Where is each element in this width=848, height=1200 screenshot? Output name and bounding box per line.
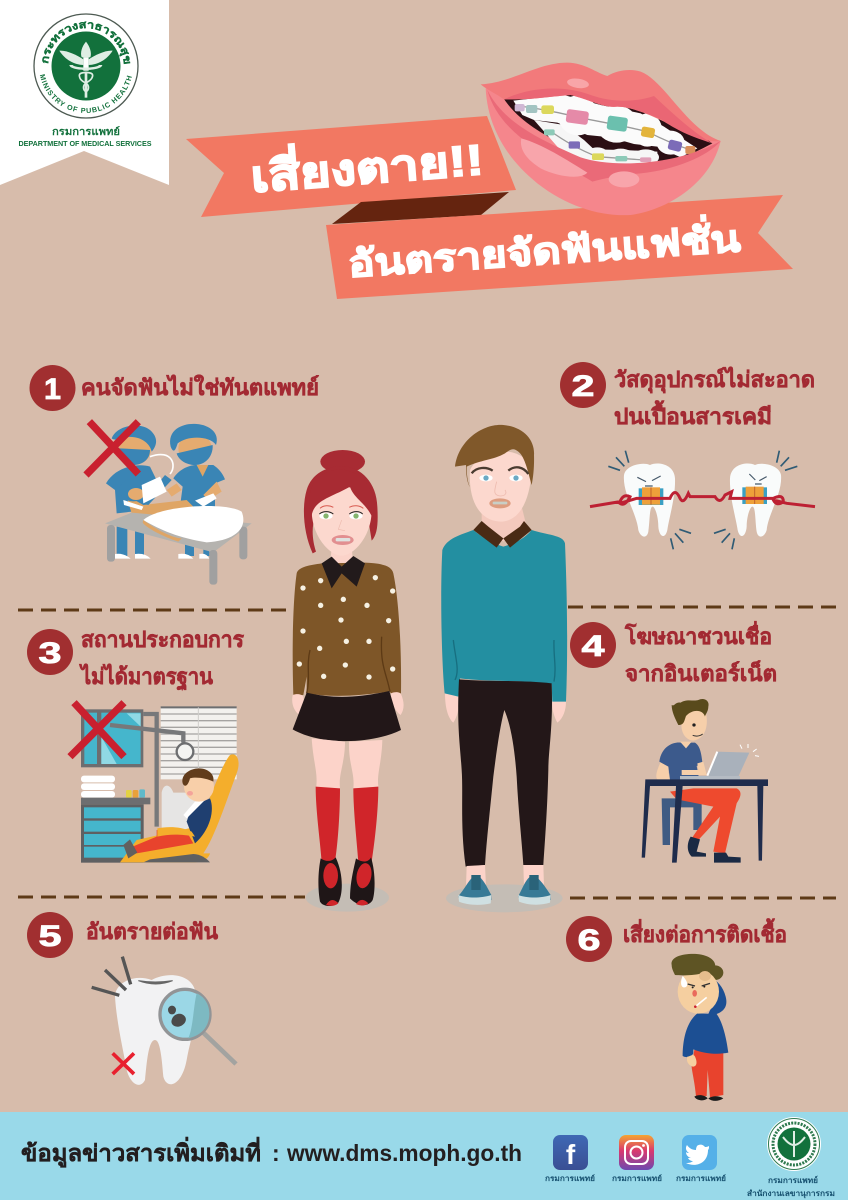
icon: twitter	[682, 1135, 717, 1170]
dental chair	[120, 754, 239, 862]
department name thai: กรมการแพทย์	[52, 126, 120, 138]
upper teeth	[513, 95, 697, 157]
upper lip shading	[504, 89, 712, 143]
table	[105, 513, 252, 552]
arms	[167, 482, 222, 500]
item 1 heading: คนจัดฟันไม่ใช่ทันตแพทย์	[81, 374, 319, 400]
sweat drop	[681, 976, 687, 987]
boy torso	[187, 798, 212, 843]
shoes	[694, 1095, 723, 1101]
neck	[482, 507, 527, 542]
footer bar	[0, 1112, 848, 1200]
lamp arm	[110, 714, 183, 827]
right surgeon legs	[185, 540, 209, 556]
item 4 heading	[624, 620, 777, 686]
footer info text	[21, 1136, 522, 1168]
social labels: กรมการแพทย์	[545, 1174, 595, 1183]
face	[470, 451, 532, 522]
man character	[441, 425, 567, 912]
nose	[692, 990, 697, 997]
stress marks	[92, 957, 131, 995]
item 4 number badge: 4	[582, 630, 605, 663]
cabinet	[81, 798, 150, 804]
item 4 heading: โฆษณาชวนเชื่อ	[624, 620, 772, 649]
red cross	[86, 422, 138, 475]
brows	[472, 467, 528, 474]
hands	[445, 693, 566, 723]
item 6 illustration: sick boy	[672, 954, 728, 1101]
stress marks	[608, 451, 797, 549]
item 6 number badge: 6	[578, 924, 600, 957]
polka dots	[297, 575, 395, 680]
mouth interior	[502, 92, 712, 165]
item 2 number badge: 2	[572, 370, 594, 403]
boy head	[184, 772, 214, 802]
raised arm	[707, 977, 726, 1014]
item 1 number badge: 1	[44, 373, 61, 406]
social labels	[545, 1174, 726, 1183]
title ribbon 2	[326, 195, 793, 299]
spittoon	[162, 786, 197, 830]
sweater folds	[453, 640, 555, 682]
item 4 heading: จากอินเตอร์เน็ต	[625, 659, 777, 686]
legs	[670, 788, 741, 853]
dashed dividers	[18, 607, 836, 898]
hair	[455, 425, 534, 487]
left surgeon legs	[117, 527, 144, 556]
hair	[672, 954, 715, 975]
item 3 number badge	[27, 629, 73, 675]
hair back	[304, 466, 378, 553]
thermometer	[695, 997, 707, 1007]
ankles	[466, 865, 544, 887]
hands	[292, 692, 404, 715]
item 3 number badge: 3	[38, 637, 62, 670]
magnifier	[203, 1033, 236, 1064]
head	[678, 970, 719, 1014]
seal ring	[34, 14, 138, 118]
hand	[699, 971, 711, 981]
neck	[330, 547, 353, 567]
woman character	[292, 450, 404, 912]
shoes	[318, 857, 375, 906]
item 6 number badge	[566, 916, 612, 962]
item 3 heading: ไม่ได้มาตรฐาน	[79, 663, 213, 691]
right surgeon head	[178, 433, 212, 464]
right tooth	[730, 464, 781, 537]
item 5 illustration: tooth and magnifier	[92, 957, 236, 1085]
footer info text: :	[272, 1140, 280, 1166]
item 2 heading: วัสดุอุปกรณ์ไม่สะอาด	[614, 366, 815, 394]
upper lip	[481, 63, 721, 141]
item 4 number badge	[570, 622, 616, 668]
eyes	[319, 513, 333, 519]
ribbon fold	[332, 192, 509, 224]
shoes	[458, 875, 551, 901]
shoes	[688, 837, 706, 857]
title line 1: เสี่ยงตาย!!	[249, 129, 485, 202]
item 1 illustration: surgeons	[86, 422, 252, 585]
lower inner lip	[487, 90, 721, 182]
laptop	[708, 752, 749, 777]
item 4 illustration: man at laptop	[642, 699, 768, 863]
faces	[637, 474, 767, 486]
collar	[473, 521, 532, 548]
mouth with braces	[481, 63, 721, 215]
spark lines	[740, 744, 759, 756]
table	[642, 779, 768, 863]
item 1 number badge	[30, 365, 76, 411]
towels	[81, 776, 115, 782]
brackets	[515, 104, 695, 162]
item 3 illustration: dental clinic	[70, 703, 239, 863]
legs	[312, 738, 382, 788]
nose and lips	[338, 520, 345, 531]
collar	[322, 556, 365, 588]
fringe	[309, 469, 374, 518]
floor shadow	[306, 884, 389, 912]
ministry logo banner	[0, 0, 169, 185]
arch wire	[519, 106, 691, 160]
social labels: กรมการแพทย์	[612, 1174, 662, 1183]
item 5 number badge: 5	[38, 920, 62, 953]
eyes	[479, 475, 493, 481]
title line 2: อันตรายจัดฟันแฟชั่น	[346, 212, 742, 285]
skirt	[293, 691, 401, 741]
footer seal	[767, 1117, 821, 1171]
icon: instagram	[619, 1135, 654, 1170]
seal emblem	[59, 42, 113, 98]
trousers	[458, 679, 552, 867]
item 2 heading: ปนเปื้อนสารเคมี	[614, 400, 772, 429]
torso	[683, 1013, 728, 1057]
arm back	[656, 760, 680, 779]
footer info text: www.dms.moph.go.th	[286, 1140, 522, 1166]
item 5 heading: อันตรายต่อฟัน	[86, 919, 218, 944]
lower teeth	[534, 120, 659, 168]
sheet	[143, 506, 243, 542]
decay spots	[168, 1006, 176, 1014]
footer seal labels: กรมการแพทย์	[768, 1175, 818, 1185]
arm	[682, 762, 707, 775]
item 2 heading	[614, 366, 815, 429]
red cross	[70, 703, 124, 757]
hair back	[707, 965, 723, 980]
seal text top: กระทรวงสาธารณสุข	[42, 21, 130, 64]
drip tube	[150, 455, 173, 474]
icon: facebook: f	[566, 1139, 576, 1170]
left surgeon head	[119, 434, 151, 465]
footer seal labels	[747, 1175, 835, 1199]
left tooth	[624, 464, 675, 537]
item 2 illustration: teeth pulling wire	[590, 451, 815, 549]
item 3 heading	[79, 627, 244, 691]
right surgeon body	[173, 465, 225, 510]
eyes	[688, 983, 710, 986]
window blinds	[161, 707, 237, 779]
torso	[659, 743, 703, 780]
floor shadow	[446, 884, 563, 912]
boy legs	[128, 830, 193, 853]
left surgeon body	[106, 465, 157, 513]
chair	[662, 798, 702, 845]
social labels: กรมการแพทย์	[676, 1174, 726, 1183]
item 2 number badge	[560, 362, 606, 408]
seal text bottom: MINISTRY OF PUBLIC HEALTH	[40, 74, 132, 113]
bottles	[126, 790, 132, 798]
lip highlights	[566, 77, 590, 89]
lower hand	[687, 1055, 697, 1067]
footer seal labels: สำนักงานเลขานุการกรม	[747, 1189, 835, 1199]
item 5 number badge	[27, 912, 73, 958]
title ribbon 1	[186, 116, 516, 224]
socks	[316, 787, 378, 862]
red wire	[590, 492, 815, 507]
legs	[692, 1050, 723, 1097]
sweater	[441, 530, 567, 702]
red x	[113, 1053, 134, 1074]
brackets	[639, 488, 663, 505]
department name english: DEPARTMENT OF MEDICAL SERVICES	[18, 139, 152, 148]
nose and lips	[495, 482, 506, 496]
wall cabinet	[81, 709, 143, 767]
patient	[126, 495, 193, 530]
item 3 heading: สถานประกอบการ	[81, 627, 244, 652]
icon: facebook	[553, 1135, 588, 1170]
tooth	[115, 975, 196, 1085]
sweater folds	[307, 637, 390, 693]
sweater	[293, 563, 401, 696]
lower lip	[486, 88, 721, 215]
head	[681, 708, 707, 741]
seal green disc	[52, 32, 120, 100]
footer info text: ข้อมูลข่าวสารเพิ่มเติมที่	[21, 1136, 261, 1168]
item 6 heading: เสี่ยงต่อการติดเชื้อ	[623, 918, 787, 947]
hair bun	[320, 450, 365, 473]
face	[312, 487, 372, 556]
